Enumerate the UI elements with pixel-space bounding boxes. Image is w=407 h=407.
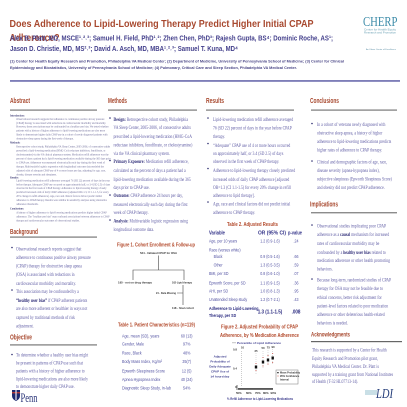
background text: “healthy user bias” if CPAP adherent patients	[16, 297, 87, 303]
abstract text: adherence. The "healthy user bias" may confound associations between adherence to CPAP	[16, 214, 110, 219]
conclusions text: In a cohort of veterans newly diagnosed with	[317, 121, 386, 127]
heading: methods: Methods	[108, 98, 127, 105]
table 2: adjusted results: Therapy, per SD	[209, 313, 236, 318]
results text	[213, 116, 296, 215]
figure 2 title: Figure 2. Adjusted Probability of CPAP	[221, 324, 298, 330]
abstract text: therapy and cardiovascular outcomes of observational studies.	[16, 218, 80, 223]
conclusions text: disease severity (apnea-hypopnea index),	[317, 167, 380, 174]
legend	[276, 370, 301, 384]
methods text: week of CPAP therapy.	[114, 210, 149, 215]
authors: Jason D. Christie, MD, MS²˒³; David A. Asch, MD, MBA¹˒²˒³; Samuel T. Kuna, MD⁴	[10, 46, 238, 53]
conclusions text: and obesity did not predict CPAP adherence.	[317, 184, 385, 190]
results text: Age, race and clinical factors did not predict initial	[213, 201, 291, 208]
conclusions text: subjective sleepiness (Epworth Sleepiness Score)	[317, 176, 392, 182]
implications text: confounded by a healthy user bias related to	[317, 249, 386, 255]
figure 2: adjusted probability chart: 60%	[246, 391, 252, 395]
figure 2: adjusted probability chart	[209, 324, 301, 401]
heading: abstract: Abstract	[10, 98, 30, 105]
figure 2: adjusted probability chart: Probability of	[210, 360, 230, 364]
figure 1: cohort flow diagram: 24 - Data Missing	[156, 291, 176, 295]
background text	[16, 246, 91, 329]
table 1: patient characteristics: 97%	[183, 341, 191, 347]
table 1: patient characteristics: Gender, Male	[122, 341, 145, 347]
acknowledgments text: of Health (T-32 HL07713-14).	[312, 378, 358, 384]
results text: on approximately half, or 3.4 (SD 2.5) of days	[213, 150, 284, 157]
authors: Alex B. Platt, MD, MSCE¹˒²˒³; Samuel H. Field, PhD¹˒²; Zhen Chen, PhD³; Rajesh Gupta, BS⁴; Dominic Roche, AS¹;	[10, 36, 333, 42]
figure 2: adjusted probability chart: 50	[262, 346, 265, 350]
results text: Lipid-lowering medication refill adherence averaged	[213, 116, 294, 122]
results text: therapy.	[213, 134, 225, 139]
figure 1: cohort flow diagram: 195 - not on drug therapy	[118, 280, 152, 284]
methods text: via the VA clinical pharmacy system.	[114, 150, 170, 156]
methods text: measured electronically each day during the first	[114, 201, 188, 207]
implications text: behaviors.	[317, 266, 333, 272]
x axis caption: % Refill Adherence to Lipid-Lowering Medications	[227, 397, 293, 401]
results text: OR=1.3 (CI 1.1-1.5) for every 20% change in refill	[213, 185, 291, 190]
table 2: adjusted results: Unattended Sleep study	[209, 296, 248, 302]
methods text	[114, 116, 193, 232]
table 2: adjusted results: 1.3 (0.5-3.5)	[260, 262, 280, 268]
abstract text	[10, 113, 111, 223]
acknowledgments text: Equity Research and Promotion pilot grant,	[312, 355, 378, 362]
table 2: adjusted results: Adherence to Lipid-Lowering	[209, 305, 259, 311]
results text: adherence to lipid therapy].	[213, 193, 255, 198]
abstract text: Results:	[10, 175, 19, 179]
table 1: patient characteristics: Diagnostic Sleep Study, In-lab	[122, 385, 172, 391]
table 2: adjusted results: Epworth Score, per SD	[209, 280, 246, 285]
methods text: prescribed a lipid-lowering medication (HMG-CoA	[114, 133, 193, 139]
table 2: adjusted results: .24	[294, 238, 299, 244]
objective text: be present in patterns of CPAP use such that	[16, 360, 84, 366]
abstract text: to CPAP use. Adherence was measured electronically each day during the first week of	[16, 160, 105, 165]
panel: conclusions	[310, 98, 397, 190]
table 2: adjusted results: Black	[214, 253, 223, 259]
table 1: patient characteristics: 40 (24)	[181, 376, 193, 382]
table 2: adjusted results: 0.9 (0.5-1.6)	[260, 253, 280, 259]
abstract text: patients with a history of higher adherence to lipid-lowering medications are also more	[16, 128, 106, 133]
abstract text: Retrospective cohort study, Philadelphia VA Sleep Center, 2005-2006, of consecutive adults	[16, 144, 111, 150]
abstract text: Methods:	[10, 140, 20, 145]
objective text: To determine whether a healthy user bias might	[16, 352, 89, 358]
figure 2: adjusted probability chart: 75	[267, 346, 270, 350]
background text: (CPAP) therapy for obstructive sleep apnea	[16, 263, 82, 269]
figure 2: adjusted probability chart: CPAP Use of	[211, 370, 229, 374]
table 2: adjusted results: 1.2 (0.7-2.1)	[260, 296, 280, 302]
methods text: Analysis: Multivariable logistic regression using	[114, 218, 189, 224]
figure 2: adjusted probability chart: Daily Adequate	[209, 365, 231, 369]
implications text: patient-level factors related to poor medication	[317, 303, 389, 309]
legend: Mean Probability	[280, 372, 301, 374]
figure 1 title: Figure 1. Cohort Enrollment & Follow-up	[117, 242, 195, 248]
table 2: adjusted results: Age, per 10 years	[209, 238, 237, 244]
background text: are also more adherent or healthier in ways not	[16, 306, 88, 311]
conclusions text	[317, 121, 392, 190]
implications text: adherence or other deleterious health-related	[317, 312, 385, 317]
logo: CHERP: Center for Health Equity	[364, 28, 397, 32]
table 1: patient characteristics: 60 (13)	[181, 333, 193, 338]
table 2 header: p-value	[288, 230, 302, 236]
background text: Observational research reports suggest that	[16, 246, 82, 252]
implications text: rates of cardiovascular morbidity may be	[317, 240, 379, 246]
abstract text: (CPAP) therapy is associated with reductions in cardiovascular morbidity and mortality.	[16, 120, 106, 125]
abstract text: adjusted odds of adequate CPAP use of 4 or more hours per day, adjusting for age, race,	[16, 168, 106, 174]
background text: (OSA) is associated with reductions in	[16, 271, 75, 277]
table 2: adjusted results: .43	[294, 296, 299, 302]
heading: objective: Objective	[10, 334, 32, 342]
logo: LDI	[365, 387, 394, 402]
abstract text: predicted increased odds of daily CPAP adherence (adjusted OR=1.3, CI 1.1-1.5, for every	[16, 190, 109, 195]
heading: results: Results	[206, 98, 224, 105]
table 1: patient characteristics	[118, 322, 195, 391]
table 2: adjusted results: 0.8 (0.6-1.0)	[260, 270, 280, 276]
figure 2: adjusted probability chart: Percentile of Lipid Adherence	[237, 341, 281, 345]
title	[10, 18, 314, 44]
table 2: adjusted results: Other	[214, 262, 223, 268]
results text: Adherence to lipid-lowering therapy closely predicted	[213, 167, 296, 173]
results text: adherence to CPAP therapy.	[213, 210, 255, 215]
figure 2: adjusted probability chart: 70%	[255, 391, 261, 395]
table 1: patient characteristics: 54%	[183, 385, 191, 391]
methods text: Outcome: CPAP adherence 24 hours per day,	[114, 193, 183, 199]
logo: CHERP: An Urban Center of Excellence	[366, 48, 397, 51]
heading: acknowledgments: Acknowledgments	[311, 332, 350, 338]
background text: This association may be confounded by a	[16, 289, 79, 294]
figure 1: cohort flow diagram: 118 - final cohort	[172, 306, 194, 310]
results text: observed in the first week of CPAP therapy.	[213, 159, 279, 164]
implications text: Observational studies implicating poor CPAP	[317, 223, 387, 229]
conclusions text: higher rates of adherence to CPAP therapy.	[317, 147, 382, 153]
abstract text: cholestyramine) via the VA clinical pharmacy system. Medication refill adherence was the	[16, 152, 109, 157]
methods text: lipid-lowering medication available during the 365	[114, 176, 191, 182]
background text: adjustment.	[16, 323, 34, 329]
abstract text: Lipid-lowering medication refill adherence averaged 76 (SD 22) percent of days in the year	[16, 178, 110, 183]
title: Does Adherence to Lipid-Lowering Therapy Predict Higher Initial CPAP	[10, 18, 314, 30]
figure 2: adjusted probability chart: 90	[272, 345, 275, 349]
table 2: adjusted results: .008	[292, 309, 300, 316]
abstract text: Conclusions:	[10, 206, 24, 210]
figure 2: adjusted probability chart: ≥4 hours/day	[211, 375, 230, 379]
objective text: to demonstrate higher daily CPAP use.	[16, 384, 75, 389]
figure 1: cohort flow diagram	[117, 242, 195, 310]
panel: implications	[310, 202, 397, 326]
title: Adherence?	[10, 32, 60, 44]
figure 2: adjusted probability chart: 25	[254, 349, 258, 353]
objective text: patients with a history of higher adherence to	[16, 368, 85, 374]
objective text: lipid-lowering medications are also more likely	[16, 376, 89, 382]
data points	[255, 353, 274, 371]
table 1: patient characteristics: Apnea Hypopnea Index	[122, 376, 161, 382]
logo: LDI: LDI	[375, 387, 394, 402]
abstract text: adherence to CPAP therapy. Results were similar in sensitivity analyses using alternative	[16, 198, 107, 202]
acknowledgments text: Philadelphia VA Medical Center. Dr. Platt is	[312, 364, 379, 369]
figure 2: adjusted probability chart: 50%	[236, 391, 242, 395]
table 2: adjusted results: .66	[294, 253, 299, 259]
affiliations	[10, 60, 344, 70]
results text: 76 (SD 22) percent of days in the year before CPAP	[213, 125, 292, 131]
legend: Interval	[280, 378, 289, 382]
figure 2 title	[220, 324, 299, 339]
figure 1: cohort flow diagram: 534 - Initiated CPAP for OSA	[140, 251, 178, 255]
table 1: patient characteristics: 35(7)	[182, 358, 192, 364]
abstract text: prescribed a lipid-lowering medication (HMG-CoA reductase inhibitors, fenofibrate, or	[16, 148, 106, 154]
methods text: VA Sleep Center, 2005-2006, of consecutive adults	[114, 125, 191, 131]
table 1: patient characteristics: Race, Black	[122, 350, 142, 355]
acknowledgments text: This research is supported by a Center for Health	[312, 347, 387, 353]
abstract text: Introduction:	[10, 113, 25, 117]
legend: 95% Confidence	[280, 375, 300, 378]
affiliations: Epidemiology and Biostatistics, University of Pennsylvania School of Medicine; (4) Pulmonary, Critical Care and Sleep Section, Philadelphia VA Medical Center.	[10, 66, 297, 70]
table 2 header: OR (95% CI)	[258, 230, 286, 236]
implications text	[317, 223, 392, 326]
figure 2: adjusted probability chart: 90%	[270, 391, 277, 395]
affiliations: (1) Center for Health Equity Research and Promotion, Philadelphia VA Medical Center; (2) Department of Medicine, University of Pennsylvania School of Medicine; (3) Center for Clinical	[10, 60, 344, 64]
logo: CHERP	[363, 14, 398, 51]
table 2: adjusted results	[209, 222, 302, 318]
table 2: adjusted results: .59	[294, 262, 299, 268]
abstract text: observed in the first week of CPAP therapy. Adherence to lipid-lowering therapy closely	[16, 186, 107, 190]
table 2 header	[209, 230, 302, 236]
panel: methods	[108, 98, 197, 232]
abstract text: percent of days a patient had a lipid-lowering medication available during the 365 days prior	[16, 156, 111, 161]
table 2: adjusted results: 1.0 (0.8-1.3)	[260, 288, 280, 294]
panel: background	[10, 227, 97, 329]
figure 2: adjusted probability chart: Adjusted	[214, 355, 227, 359]
table 2: adjusted results: .95	[294, 288, 299, 294]
objective text	[16, 352, 89, 389]
abstract text: before therapy. Adequate CPAP use occurred on approximately half, or 3.4 (SD 2.5) of days	[16, 182, 111, 188]
panel: objective	[10, 334, 97, 389]
table 1: patient characteristics: Body Mass Index, Kg/m²	[122, 358, 163, 364]
conclusions text: Clinical and demographic factors of age, race,	[317, 159, 387, 166]
table 1: patient characteristics: Age, mean (SD), years	[122, 333, 159, 338]
logo: Penn	[12, 390, 38, 405]
abstract text: However, these associations may be confounded by a healthy user bias. We tested whether	[16, 124, 109, 130]
figure 2: adjusted probability chart: 80%	[263, 391, 269, 395]
table 2: adjusted results: .36	[294, 280, 299, 285]
implications text: ethical concerns, better risk adjustment for	[317, 294, 382, 301]
table 1 title: Table 1. Patient Characteristics (n=119)	[118, 322, 195, 328]
methods text: Primary Exposure: Medication refill adherence,	[114, 159, 189, 165]
panel: acknowledgments	[311, 332, 402, 384]
logo: CHERP: Research and Promotion	[364, 32, 397, 34]
background text: adherence to continuous positive airway pressure	[16, 254, 91, 260]
heading: background: Background	[10, 227, 38, 236]
logo: CHERP: CHERP	[363, 14, 398, 29]
abstract text: likely to demonstrate higher daily CPAP use in a cohort of newly diagnosed patients with	[16, 132, 108, 137]
acknowledgments text	[312, 347, 393, 384]
implications text: therapy for OSA may not be feasible due to	[317, 285, 384, 291]
methods text: reductase inhibitors, fenofibrate, or cholestyramine)	[114, 142, 193, 149]
figure 2: adjusted probability chart: 0	[235, 385, 237, 389]
background text: captured by traditional methods of risk	[16, 314, 76, 320]
figure 2: adjusted probability chart: 0.8	[233, 348, 237, 352]
table 2: adjusted results: AHI, per SD	[209, 288, 228, 294]
heading: implications: Implications	[310, 202, 338, 208]
authors	[10, 36, 333, 53]
table 1: patient characteristics: Epworth Sleepiness Score	[122, 368, 166, 373]
abstract text: obesity, disease severity and sleepiness.	[16, 172, 57, 178]
background text: cardiovascular morbidity and mortality.	[16, 280, 76, 286]
results text: “Adequate” CPAP use of 4 or more hours occurred	[213, 142, 291, 148]
implications text: behaviors is needed.	[317, 320, 348, 326]
abstract text: Observational research suggests that adherence to continuous positive airway pressure	[16, 117, 105, 121]
implications text: medication adherence or other health promoting	[317, 258, 391, 263]
methods text: longitudinal outcome data.	[114, 227, 154, 232]
table 2: adjusted results: BMI, per SD	[209, 270, 228, 276]
figure 2 title: Adherence, by % Medication Adherence	[220, 333, 299, 339]
table 2: adjusted results: .07	[294, 270, 299, 276]
heading: conclusions: Conclusions	[310, 98, 339, 105]
abstract text: A history of higher adherence to lipid-lowering medications predicts higher initial CPAP	[16, 210, 107, 215]
implications text: Because long-term, randomized studies of CPAP	[317, 277, 392, 284]
methods text: Design: Retrospective cohort study, Philadelphia	[114, 116, 188, 123]
results text: increased odds of daily CPAP adherence [adjusted	[213, 176, 290, 182]
panel: abstract	[10, 98, 111, 223]
methods text: calculated as the percent of days a patient had a	[114, 167, 186, 173]
table 2: adjusted results: 1.1 (0.9-1.5)	[260, 280, 280, 285]
abstract text: adherence thresholds.	[16, 202, 39, 206]
table 2 header: Variable	[209, 230, 225, 236]
table 2: adjusted results: 1.3 (1.1-1.5)	[258, 309, 283, 316]
table 2: adjusted results: 1.2 (0.9-1.6)	[260, 238, 280, 244]
logo: Penn: Penn	[20, 390, 38, 405]
table 2 title: Table 2. Adjusted Results	[227, 222, 278, 228]
abstract text: 20% change in refill adherence). Age, race and clinical factors did not predict initial	[16, 194, 102, 199]
table 1: patient characteristics: 48%	[183, 350, 191, 355]
conclusions text: obstructive sleep apnea, a history of higher	[317, 130, 383, 137]
table 1: patient characteristics: 12 (5)	[182, 368, 192, 373]
abstract text: obstructive sleep apnea during the first week of therapy.	[16, 136, 74, 141]
abstract text: therapy. Multivariable logistic regression with longitudinal outcome data modeled the	[16, 164, 105, 169]
figure 2: adjusted probability chart: 10	[241, 346, 245, 350]
panel: results	[206, 98, 296, 215]
figure 1: cohort flow diagram: 162-Lipid therapy	[172, 280, 192, 284]
implications text: adherence as a causal mechanism for increased	[317, 232, 390, 237]
table 2: adjusted results: Race (versus white)	[209, 247, 241, 253]
conclusions text: adherence to lipid-lowering medications predicts	[317, 139, 391, 144]
methods text: days prior to CPAP use.	[114, 185, 150, 190]
figure 2: adjusted probability chart: 0.4	[233, 366, 237, 370]
acknowledgments text: supported by a training grant from National Institutes	[312, 371, 393, 377]
